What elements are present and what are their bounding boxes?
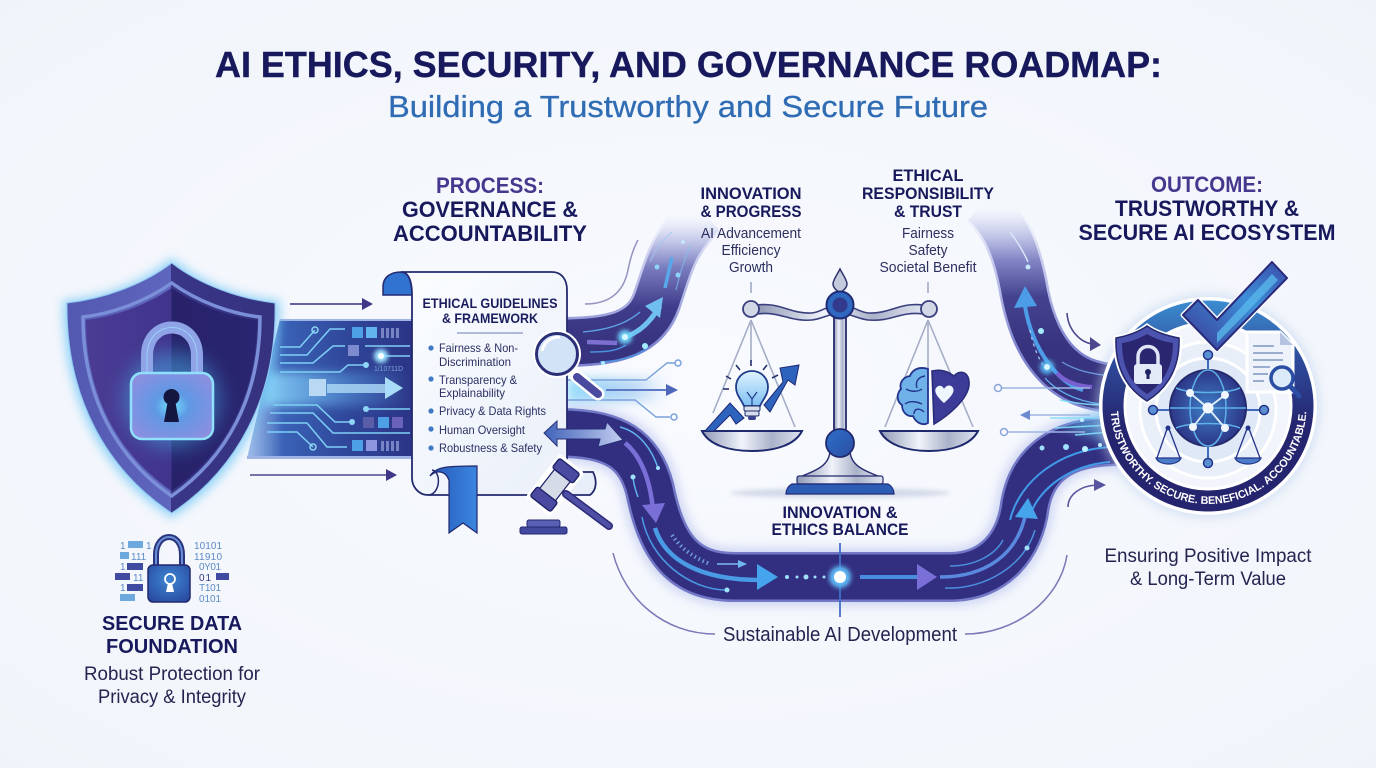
innovation and progress text: Growth xyxy=(729,259,773,276)
balance label: ETHICS BALANCE xyxy=(772,520,908,539)
scroll bullets: Explainability xyxy=(439,386,505,400)
road arrow and nodes upper right xyxy=(1014,264,1054,374)
balance label xyxy=(772,503,908,539)
scroll paper xyxy=(401,272,596,495)
balance scale xyxy=(702,269,978,498)
heading xyxy=(102,613,242,658)
small padlock with binary: 1 xyxy=(146,541,152,552)
data flow arrow xyxy=(309,377,403,399)
scroll bullets: Human Oversight xyxy=(439,423,526,437)
icon: growth arrow xyxy=(705,365,799,431)
icon: large checkmark xyxy=(1183,262,1287,350)
process heading: GOVERNANCE & xyxy=(402,197,578,222)
balance label: INNOVATION & xyxy=(782,503,898,522)
description xyxy=(84,664,261,708)
small padlock with binary: 1 xyxy=(120,583,126,594)
outcome badge xyxy=(1090,261,1323,521)
framework scroll xyxy=(383,272,596,533)
small padlock with binary: 0101 xyxy=(199,594,221,605)
connecting curl top xyxy=(383,272,412,295)
secure data foundation xyxy=(84,537,261,708)
scroll bullets: Fairness & Non- xyxy=(439,341,518,355)
process heading xyxy=(393,173,587,246)
scroll bullets: Privacy & Data Rights xyxy=(439,404,546,418)
ethical responsibility and trust text: ETHICAL xyxy=(892,166,964,185)
small padlock with binary: 1 xyxy=(120,541,126,552)
centre node and connector xyxy=(829,543,851,617)
ribbon xyxy=(430,466,477,533)
post xyxy=(834,305,846,455)
scroll bullets xyxy=(428,341,546,455)
small padlock with binary: 0Y01 xyxy=(199,562,221,573)
innovation and progress text xyxy=(700,184,802,276)
icon: document with magnifier xyxy=(1247,332,1299,396)
process heading: ACCOUNTABILITY xyxy=(393,221,587,246)
heading: SECURE DATA xyxy=(102,613,242,635)
ethical responsibility and trust text: RESPONSIBILITY xyxy=(862,184,995,203)
main title: AI ETHICS, SECURITY, AND GOVERNANCE ROADMAP: xyxy=(215,44,1162,85)
two-way arrow xyxy=(544,421,623,447)
gavel xyxy=(520,453,609,534)
icon: globe network with scales xyxy=(1148,350,1268,468)
innovation and progress text: & PROGRESS xyxy=(700,202,802,221)
description: Privacy & Integrity xyxy=(98,687,246,708)
ethical responsibility and trust text: & TRUST xyxy=(894,202,963,221)
ethical responsibility and trust text: Safety xyxy=(908,242,948,259)
description: Robust Protection for xyxy=(84,664,261,685)
left pan xyxy=(702,431,802,451)
innovation and progress text: INNOVATION xyxy=(700,184,802,203)
innovation and progress text: Efficiency xyxy=(722,242,781,259)
icon: brain and heart xyxy=(898,368,969,424)
process heading: PROCESS: xyxy=(436,173,544,198)
small padlock with binary xyxy=(115,537,229,605)
heading: FOUNDATION xyxy=(106,636,238,658)
ring motto: TRUSTWORTHY. SECURE. BENEFICIAL. ACCOUNTABLE. xyxy=(1110,411,1306,504)
outcome description: Ensuring Positive Impact xyxy=(1104,546,1312,567)
arrow: into framework lower xyxy=(250,469,397,481)
shield with padlock xyxy=(63,258,280,518)
scroll heading: & FRAMEWORK xyxy=(442,310,538,326)
title xyxy=(215,44,1162,124)
small padlock with binary: 11 xyxy=(133,573,144,584)
scroll bullets: Transparency & xyxy=(439,373,517,387)
curved arrow into badge bottom xyxy=(1068,479,1106,507)
scroll bullets: Robustness & Safety xyxy=(439,441,542,455)
subtitle: Building a Trustworthy and Secure Future xyxy=(388,89,988,124)
beam xyxy=(757,304,923,320)
left strings xyxy=(713,320,973,427)
finial xyxy=(833,269,847,293)
road arrows lower xyxy=(630,444,1069,592)
data pipeline band: 1/10711D xyxy=(374,366,403,373)
arrow: into framework upper xyxy=(290,298,373,310)
magnifying glass xyxy=(533,330,598,394)
small padlock with binary: 111 xyxy=(131,552,147,563)
curved arrow into badge top xyxy=(1067,313,1101,351)
small padlock with binary: 10101 xyxy=(194,541,222,552)
outcome heading xyxy=(1078,172,1336,245)
road: lower path through sustainable development xyxy=(560,427,1118,590)
outcome heading: OUTCOME: xyxy=(1151,172,1263,197)
decorative curve upper left xyxy=(585,240,638,304)
innovation and progress text: AI Advancement xyxy=(701,225,802,242)
scroll heading: ETHICAL GUIDELINES xyxy=(422,295,558,311)
thin connectors from scales to outcome xyxy=(994,384,1090,436)
data pipeline band xyxy=(247,319,412,459)
ethical responsibility and trust text: Fairness xyxy=(902,225,954,242)
ethical responsibility and trust text xyxy=(862,166,995,276)
keyhole xyxy=(164,389,180,422)
sustainable development label with brackets xyxy=(613,553,1067,646)
road arrow and nodes upper left xyxy=(601,240,685,365)
small padlock with binary: T101 xyxy=(199,583,221,594)
scroll heading xyxy=(422,295,558,326)
outcome description xyxy=(1104,546,1312,590)
road: upper right to outcome xyxy=(983,203,1118,405)
data streams meeting the outcome badge xyxy=(1050,400,1115,452)
right pan xyxy=(880,431,978,451)
scroll bullets: Discrimination xyxy=(439,355,511,369)
icon: mini shield with lock xyxy=(1113,323,1182,404)
small padlock with binary: 11910 xyxy=(194,552,222,563)
base xyxy=(800,450,880,477)
small padlock with binary: 1 xyxy=(120,562,126,573)
outcome description: & Long-Term Value xyxy=(1130,569,1286,590)
outcome heading: SECURE AI ECOSYSTEM xyxy=(1078,220,1336,245)
small padlock with binary: 01 xyxy=(199,573,211,584)
outcome heading: TRUSTWORTHY & xyxy=(1115,196,1299,221)
icon: light bulb xyxy=(723,360,778,420)
ethical responsibility and trust text: Societal Benefit xyxy=(880,259,977,276)
thin connectors from framework to scales xyxy=(567,360,681,420)
sustainable development label with brackets: Sustainable AI Development xyxy=(723,624,957,646)
road: upper left to innovation xyxy=(560,213,704,362)
